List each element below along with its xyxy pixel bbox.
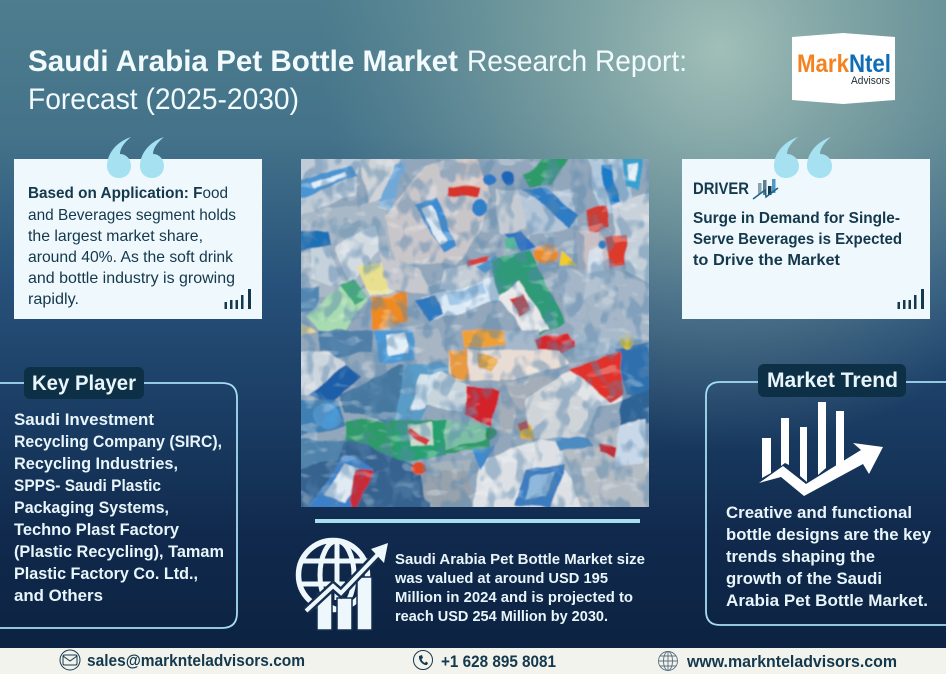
text: website: www.marknteladvisors.com <box>686 653 897 671</box>
text: key player list: (Plastic Recycling), Tamam <box>14 543 224 561</box>
text: market size: reach USD 254 Million by 2030. <box>395 608 608 625</box>
logo: MarkNtel Advisors: Advisors <box>851 75 890 87</box>
text: trend statement: trends shaping the <box>726 548 875 566</box>
icon: phone <box>414 650 432 670</box>
text: key player list <box>14 411 224 605</box>
heading: market trend: Market Trend <box>767 369 898 392</box>
logo: MarkNtel Advisors <box>792 33 895 104</box>
text: application summary: rapidly. <box>28 291 79 308</box>
text: market size: was valued at around USD 195 <box>394 570 608 587</box>
text: application summary: Based on Application: Food <box>28 185 228 202</box>
text: driver statement <box>693 210 902 269</box>
text: market size: Saudi Arabia Pet Bottle Market size <box>395 551 645 568</box>
panel: market trend <box>706 364 946 625</box>
panel: driver <box>682 137 930 319</box>
text: market size <box>394 551 645 625</box>
text: key player list: SPPS- Saudi Plastic <box>14 477 161 495</box>
heading: driver: DRIVER <box>693 179 749 198</box>
text: email: sales@marknteladvisors.com <box>87 652 305 670</box>
text: phone: +1 628 895 8081 <box>441 653 556 671</box>
heading: key player: Key Player <box>32 372 136 395</box>
icon: driver chart <box>753 179 778 199</box>
title: Research Report: <box>467 45 687 78</box>
text: application summary: and bottle industry is growing <box>28 270 235 287</box>
icon: email <box>60 650 80 670</box>
text: driver statement: to Drive the Market <box>693 252 841 269</box>
panel: key player <box>0 367 237 628</box>
text: trend statement <box>726 504 932 610</box>
heading: market trend <box>758 364 906 397</box>
icon: quote marks left <box>107 137 164 178</box>
text: key player list: Recycling Industries, <box>14 455 178 473</box>
text: market size: Million in 2024 and is projected to <box>395 589 633 606</box>
text: trend statement: Arabia Pet Bottle Market. <box>726 592 928 610</box>
icon: globe <box>658 652 678 670</box>
title: Forecast (2025-2030) <box>28 83 299 116</box>
text: driver statement: Surge in Demand for Single- <box>693 210 900 227</box>
icon: globe with growth chart <box>298 540 388 630</box>
text: application summary: around 40%. As the soft drink <box>28 249 234 266</box>
text: application summary: the largest market share, <box>28 228 203 245</box>
text: trend statement: bottle designs are the key <box>726 526 932 544</box>
logo: MarkNtel Advisors: MarkNtel <box>797 50 891 78</box>
title <box>28 45 687 116</box>
text: key player list: Techno Plast Factory <box>14 521 180 539</box>
text: trend statement: Creative and functional <box>726 504 912 522</box>
text: key player list: Packaging Systems, <box>14 499 169 517</box>
text: key player list: Plastic Factory Co. Ltd., <box>14 565 198 583</box>
text: trend statement: growth of the Saudi <box>726 570 882 588</box>
photo: pile of plastic bottles <box>301 159 649 507</box>
text: key player list: and Others <box>14 587 103 605</box>
title: Saudi Arabia Pet Bottle Market <box>28 45 458 78</box>
text: application summary: and Beverages segment holds <box>28 207 236 224</box>
footer bar <box>0 648 946 674</box>
text: application summary <box>28 185 236 308</box>
icon: quote marks right <box>774 137 832 178</box>
heading: key player <box>24 367 144 399</box>
icon: trend chart with arrow <box>759 402 883 496</box>
panel: based on application <box>14 137 262 319</box>
text: key player list: Saudi Investment <box>14 411 155 429</box>
divider bar <box>315 519 640 523</box>
text: key player list: Recycling Company (SIRC), <box>14 433 222 451</box>
icon: signal bars <box>224 289 251 309</box>
icon: signal bars <box>898 289 924 309</box>
text: driver statement: Serve Beverages is Expected <box>693 231 902 248</box>
